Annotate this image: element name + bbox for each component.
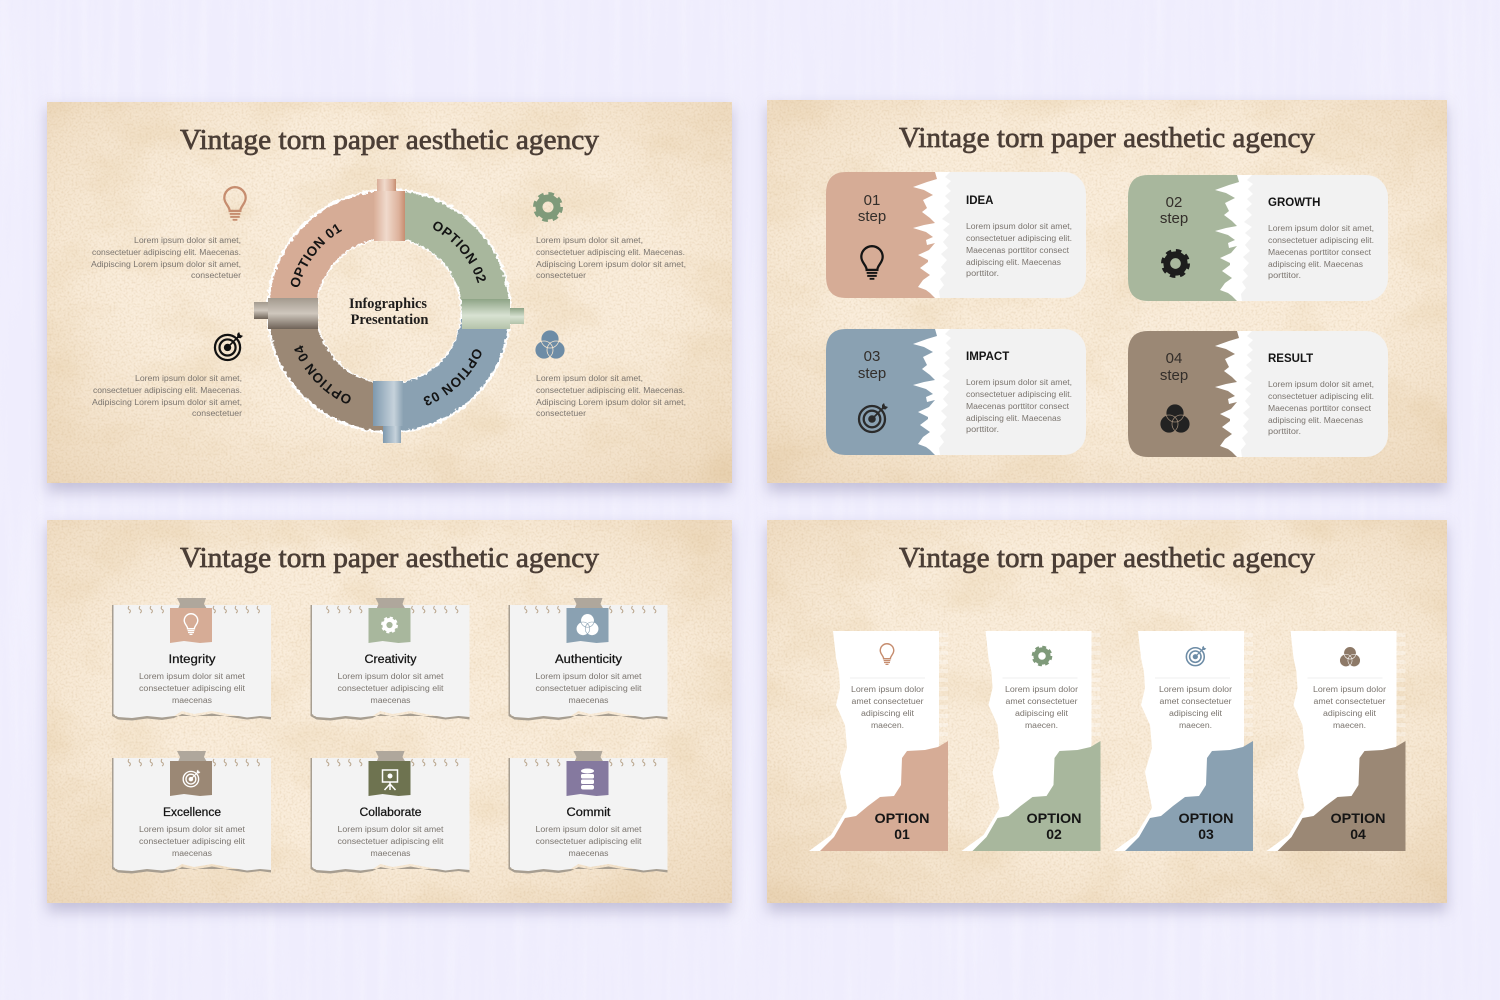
column text: adipiscing elit bbox=[861, 709, 915, 718]
centre label: Presentation bbox=[350, 312, 429, 328]
card: growth bbox=[1128, 175, 1388, 301]
icon: target bbox=[859, 403, 888, 432]
icon tile bbox=[566, 608, 608, 643]
text block: option 02: consectetuer adipiscing elit. Maecenas. bbox=[536, 248, 685, 257]
icon: circles bbox=[535, 330, 565, 359]
card text: adipiscing elit. Maecenas bbox=[1268, 260, 1363, 269]
note: collaborate bbox=[310, 751, 470, 874]
icon: gear bbox=[1163, 251, 1188, 276]
card text: porttitor. bbox=[966, 425, 999, 434]
card text: Maecenas porttitor consect bbox=[966, 402, 1070, 411]
card text: consectetuer adipiscing elit. bbox=[1268, 236, 1374, 245]
card title: IDEA bbox=[966, 195, 993, 207]
icon: bulb bbox=[861, 246, 883, 279]
text block: option 01: Adipiscing Lorem ipsum dolor sit amet, bbox=[91, 260, 241, 269]
column: option 01 bbox=[809, 631, 948, 851]
text block: option 01: Lorem ipsum dolor sit amet, bbox=[134, 236, 241, 245]
step label: step bbox=[858, 208, 886, 225]
note text: consectetuer adipiscing elit bbox=[536, 837, 642, 846]
step label: step bbox=[858, 365, 886, 382]
step label: 04 bbox=[1166, 350, 1182, 367]
column label bbox=[1026, 810, 1082, 842]
icon: target bbox=[1186, 646, 1206, 666]
note text: maecenas bbox=[172, 696, 212, 705]
heading: Vintage torn paper aesthetic agency bbox=[899, 122, 1315, 154]
text block: option 01: consectetuer bbox=[191, 271, 241, 280]
note text: Lorem ipsum dolor sit amet bbox=[536, 672, 642, 681]
card: idea bbox=[826, 172, 1086, 298]
card text: Maecenas porttitor consect bbox=[966, 246, 1070, 255]
curl: bottom bbox=[373, 381, 403, 443]
column label: OPTION bbox=[874, 810, 930, 826]
segment labels: OPTION 03 bbox=[424, 349, 482, 406]
ring white torn backing bbox=[292, 214, 486, 408]
ring segments bbox=[292, 214, 486, 408]
step label: 01 bbox=[864, 192, 880, 209]
column label bbox=[1178, 810, 1234, 842]
column label: OPTION bbox=[1178, 810, 1234, 826]
column label: OPTION bbox=[1330, 810, 1386, 826]
note text: consectetuer adipiscing elit bbox=[338, 684, 444, 693]
card text bbox=[966, 222, 1072, 278]
column label: 03 bbox=[1198, 826, 1214, 842]
text block: option 04: Lorem ipsum dolor sit amet, bbox=[135, 374, 242, 383]
step label: step bbox=[1160, 210, 1188, 227]
card text: Lorem ipsum dolor sit amet, bbox=[1268, 380, 1374, 389]
text block: option 03: consectetuer bbox=[536, 409, 586, 418]
text block: option 02: Adipiscing Lorem ipsum dolor sit amet, bbox=[536, 260, 686, 269]
column text: Lorem ipsum dolor bbox=[1159, 685, 1232, 694]
note text: maecenas bbox=[568, 696, 608, 705]
heading: Vintage torn paper aesthetic agency bbox=[180, 124, 600, 156]
text block: option 03: Adipiscing Lorem ipsum dolor sit amet, bbox=[536, 398, 686, 407]
card title: RESULT bbox=[1268, 353, 1313, 365]
column label: 04 bbox=[1350, 826, 1366, 842]
icon tile bbox=[170, 608, 212, 643]
note: authenticity bbox=[508, 598, 668, 720]
card text: adipiscing elit. Maecenas bbox=[966, 258, 1061, 267]
step label bbox=[1160, 194, 1188, 227]
column text: adipiscing elit bbox=[1015, 709, 1069, 718]
text block: option 02: consectetuer bbox=[536, 271, 586, 280]
icon: target bbox=[215, 332, 243, 360]
panel: option columns bbox=[767, 520, 1447, 912]
note text: consectetuer adipiscing elit bbox=[536, 684, 642, 693]
column text bbox=[1005, 685, 1078, 730]
column text: adipiscing elit bbox=[1323, 709, 1377, 718]
step label bbox=[1160, 350, 1188, 384]
note text bbox=[139, 825, 246, 858]
segment labels: OPTION 04 bbox=[294, 345, 351, 404]
card title: GROWTH bbox=[1268, 197, 1320, 209]
text block: option 04: Adipiscing Lorem ipsum dolor sit amet, bbox=[92, 398, 242, 407]
text block: option 02 bbox=[536, 236, 686, 280]
note text bbox=[338, 672, 444, 705]
text block: option 04 bbox=[92, 374, 242, 418]
column text: adipiscing elit bbox=[1169, 709, 1223, 718]
note: creativity bbox=[310, 598, 470, 720]
note text bbox=[338, 825, 444, 858]
icon tile bbox=[566, 761, 608, 796]
note text: maecenas bbox=[568, 849, 608, 858]
icon: gear bbox=[535, 194, 561, 220]
text block: option 04: consectetuer adipiscing elit. Maecenas. bbox=[93, 386, 242, 395]
column label bbox=[1330, 810, 1386, 842]
column text: amet consectetuer bbox=[1006, 697, 1078, 706]
icon: bulb bbox=[224, 187, 246, 220]
note text: Lorem ipsum dolor sit amet bbox=[139, 672, 246, 681]
text block: option 02: Lorem ipsum dolor sit amet, bbox=[536, 236, 643, 245]
card text: consectetuer adipiscing elit. bbox=[1268, 392, 1374, 401]
card text: consectetuer adipiscing elit. bbox=[966, 390, 1072, 399]
icon tile bbox=[368, 761, 410, 796]
panel: step cards bbox=[767, 100, 1447, 492]
curl: top bbox=[374, 179, 405, 241]
column text: maecen. bbox=[1025, 721, 1058, 730]
text block: option 03: Lorem ipsum dolor sit amet, bbox=[536, 374, 643, 383]
card text: adipiscing elit. Maecenas bbox=[966, 414, 1061, 423]
card text: porttitor. bbox=[966, 269, 999, 278]
column label: 01 bbox=[894, 826, 910, 842]
panel: ring infographic bbox=[40, 102, 738, 498]
card: impact bbox=[826, 329, 1086, 455]
heading: Vintage torn paper aesthetic agency bbox=[180, 542, 600, 574]
text block: option 03: consectetuer adipiscing elit. Maecenas. bbox=[536, 386, 685, 395]
column text bbox=[851, 685, 924, 730]
note title: Creativity bbox=[364, 654, 417, 666]
note text: consectetuer adipiscing elit bbox=[338, 837, 444, 846]
centre label bbox=[349, 296, 429, 328]
column text: amet consectetuer bbox=[852, 697, 924, 706]
icon: bulb bbox=[880, 644, 894, 664]
step label bbox=[858, 192, 886, 225]
segment labels: OPTION 02 bbox=[433, 222, 486, 284]
column text: Lorem ipsum dolor bbox=[851, 685, 924, 694]
note: commit bbox=[508, 751, 668, 874]
note text: consectetuer adipiscing elit bbox=[139, 837, 246, 846]
column text: amet consectetuer bbox=[1314, 697, 1386, 706]
note title: Collaborate bbox=[360, 807, 422, 819]
text block: option 01: consectetuer adipiscing elit. Maecenas. bbox=[92, 248, 241, 257]
note title: Excellence bbox=[163, 807, 221, 819]
column: option 02 bbox=[962, 631, 1100, 851]
column text: maecen. bbox=[871, 721, 904, 730]
heading: Vintage torn paper aesthetic agency bbox=[899, 542, 1315, 574]
note text: maecenas bbox=[370, 849, 410, 858]
icon: circles bbox=[1160, 404, 1190, 433]
step label: 03 bbox=[864, 348, 880, 365]
column text: Lorem ipsum dolor bbox=[1313, 685, 1386, 694]
note: excellence bbox=[112, 751, 271, 874]
column label: 02 bbox=[1046, 826, 1062, 842]
card text bbox=[1268, 380, 1374, 436]
note title: Authenticity bbox=[555, 654, 622, 666]
card text: Lorem ipsum dolor sit amet, bbox=[966, 222, 1072, 231]
step label bbox=[858, 348, 886, 382]
text block: option 03 bbox=[536, 374, 686, 418]
column text: amet consectetuer bbox=[1160, 697, 1232, 706]
card text: Maecenas porttitor consect bbox=[1268, 404, 1372, 413]
card text bbox=[966, 378, 1072, 434]
icon tile bbox=[170, 761, 212, 796]
column text: maecen. bbox=[1333, 721, 1366, 730]
note text bbox=[536, 672, 642, 705]
column text bbox=[1159, 685, 1232, 730]
card title: IMPACT bbox=[966, 351, 1009, 363]
card text: consectetuer adipiscing elit. bbox=[966, 234, 1072, 243]
segment labels bbox=[290, 222, 486, 406]
column text bbox=[1313, 685, 1386, 730]
card: result bbox=[1128, 331, 1388, 457]
note text: Lorem ipsum dolor sit amet bbox=[338, 825, 444, 834]
note: integrity bbox=[112, 598, 271, 720]
note title: Integrity bbox=[168, 654, 216, 666]
step label: 02 bbox=[1166, 194, 1182, 211]
note text: Lorem ipsum dolor sit amet bbox=[139, 825, 246, 834]
ring chart bbox=[254, 179, 524, 443]
column text: Lorem ipsum dolor bbox=[1005, 685, 1078, 694]
centre label: Infographics bbox=[349, 296, 427, 312]
icon: circles bbox=[1340, 647, 1360, 667]
curl: right bbox=[462, 299, 524, 329]
column: option 04 bbox=[1266, 631, 1406, 851]
segment labels: OPTION 01 bbox=[290, 224, 342, 287]
note text: maecenas bbox=[172, 849, 212, 858]
column: option 03 bbox=[1114, 631, 1253, 851]
card text: adipiscing elit. Maecenas bbox=[1268, 416, 1363, 425]
panel: value notes bbox=[47, 520, 732, 912]
column text: maecen. bbox=[1179, 721, 1212, 730]
note text: maecenas bbox=[370, 696, 410, 705]
icon tile bbox=[368, 608, 410, 643]
note title: Commit bbox=[566, 807, 611, 819]
card text: Maecenas porttitor consect bbox=[1268, 248, 1372, 257]
note text bbox=[536, 825, 642, 858]
card text: porttitor. bbox=[1268, 427, 1301, 436]
note text: consectetuer adipiscing elit bbox=[139, 684, 246, 693]
card text: Lorem ipsum dolor sit amet, bbox=[1268, 224, 1374, 233]
card text: Lorem ipsum dolor sit amet, bbox=[966, 378, 1072, 387]
column label: OPTION bbox=[1026, 810, 1082, 826]
icon: gear bbox=[1033, 647, 1051, 665]
step label: step bbox=[1160, 367, 1188, 384]
note text: Lorem ipsum dolor sit amet bbox=[536, 825, 642, 834]
curl: left bbox=[254, 298, 318, 329]
text block: option 01 bbox=[91, 236, 241, 280]
note text: Lorem ipsum dolor sit amet bbox=[338, 672, 444, 681]
column label bbox=[874, 810, 930, 842]
card text bbox=[1268, 224, 1374, 280]
card text: porttitor. bbox=[1268, 271, 1301, 280]
note text bbox=[139, 672, 246, 705]
text block: option 04: consectetuer bbox=[192, 409, 242, 418]
